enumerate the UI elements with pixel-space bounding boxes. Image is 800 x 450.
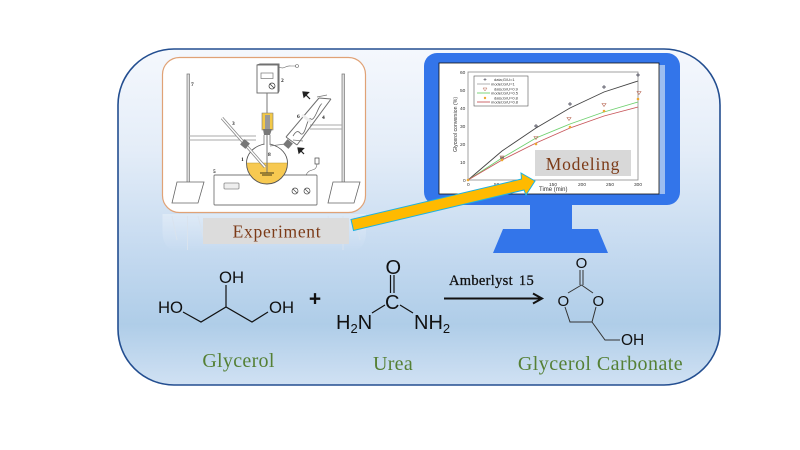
glycerol structure: OH: [219, 268, 244, 287]
model curves: [468, 81, 638, 180]
apparatus number labels: 8: [268, 152, 271, 158]
condenser: [270, 95, 331, 149]
axis tick labels: 150: [549, 182, 557, 188]
reaction arrow with catalyst label: [444, 273, 542, 304]
round bottom flask with yellow liquid: [246, 144, 288, 184]
thermometer: [222, 118, 265, 167]
controller box: [257, 64, 298, 93]
axis titles: [453, 97, 567, 193]
glycerol structure: HO: [158, 298, 183, 317]
modeling label: [535, 150, 631, 176]
glycerol structure: OH: [269, 298, 294, 317]
axis tick labels: 200: [578, 182, 586, 188]
modeling label: Modeling: [546, 154, 620, 174]
glycerol carbonate structure: O: [592, 293, 604, 310]
apparatus number labels: 2: [281, 78, 284, 84]
flow arrows: [298, 92, 310, 154]
glycerol carbonate structure: O: [558, 293, 569, 310]
line chart: glycerol conversion: [453, 70, 642, 193]
axis tick labels: 40: [460, 106, 466, 112]
axis tick labels: 100: [521, 182, 529, 188]
experiment label: [203, 218, 349, 244]
axis tick labels: 30: [460, 124, 466, 130]
reaction arrow with catalyst label: Amberlyst 15: [449, 273, 534, 289]
apparatus number labels: 7: [191, 82, 194, 88]
arrow: experiment to modeling: [351, 173, 535, 230]
urea structure: NH: [414, 312, 443, 334]
retort stands: [172, 74, 360, 203]
chart legend: data;G/U=0.9: [494, 86, 519, 92]
glycerol carbonate structure: [558, 255, 644, 349]
apparatus number labels: 3: [232, 121, 235, 127]
apparatus number labels: 1: [241, 157, 244, 163]
axis titles: Time (min): [539, 187, 567, 193]
axis tick labels: [460, 70, 642, 188]
chart legend: [474, 76, 528, 106]
background rounded panel: [118, 49, 720, 385]
glycerol carbonate structure: OH: [621, 332, 644, 349]
axis tick labels: 60: [460, 70, 466, 76]
urea structure: 2: [443, 321, 450, 336]
chart legend: data;G/U=1: [494, 77, 515, 82]
urea structure: [336, 257, 450, 336]
plus sign: +: [309, 288, 321, 310]
apparatus number labels: 4: [322, 115, 325, 121]
apparatus number labels: 6: [297, 114, 300, 120]
apparatus number labels: 5: [213, 169, 216, 175]
axis tick labels: 20: [460, 142, 466, 148]
glycerol label: Glycerol: [202, 350, 275, 372]
glycerol structure: [158, 268, 294, 322]
glycerol carbonate label: Glycerol Carbonate: [518, 353, 683, 375]
urea structure: N: [358, 312, 372, 334]
apparatus number labels: [191, 78, 325, 175]
chart legend: model;G/U=1: [491, 82, 515, 86]
glycerol carbonate structure: O: [576, 255, 587, 272]
urea label: Urea: [373, 353, 413, 375]
chart legend: model;G/U=0.5: [491, 90, 519, 96]
urea structure: 2: [350, 321, 358, 336]
axis tick labels: 300: [634, 182, 642, 188]
axis tick labels: 250: [606, 182, 614, 188]
panel: experiment apparatus: [162, 58, 366, 212]
axis titles: Glycerol conversion (%): [453, 97, 459, 152]
data markers: [467, 73, 641, 181]
axis tick labels: 0: [463, 178, 466, 184]
experiment label: Experiment: [233, 222, 321, 242]
axis tick labels: 50: [494, 182, 500, 188]
axis tick labels: 10: [460, 160, 466, 166]
icon: computer monitor: [424, 53, 680, 253]
experiment reflection: [162, 214, 366, 252]
chart legend: model;G/U=0.8: [491, 100, 519, 104]
stirrer and neck: [260, 93, 274, 175]
urea structure: O: [386, 257, 401, 279]
hot plate stirrer: [214, 158, 319, 205]
urea structure: C: [385, 292, 399, 314]
urea structure: H: [336, 312, 350, 334]
axis tick labels: 50: [460, 88, 466, 94]
chart legend: data;G/U=0.8: [494, 96, 519, 100]
axis tick labels: 0: [467, 182, 470, 188]
